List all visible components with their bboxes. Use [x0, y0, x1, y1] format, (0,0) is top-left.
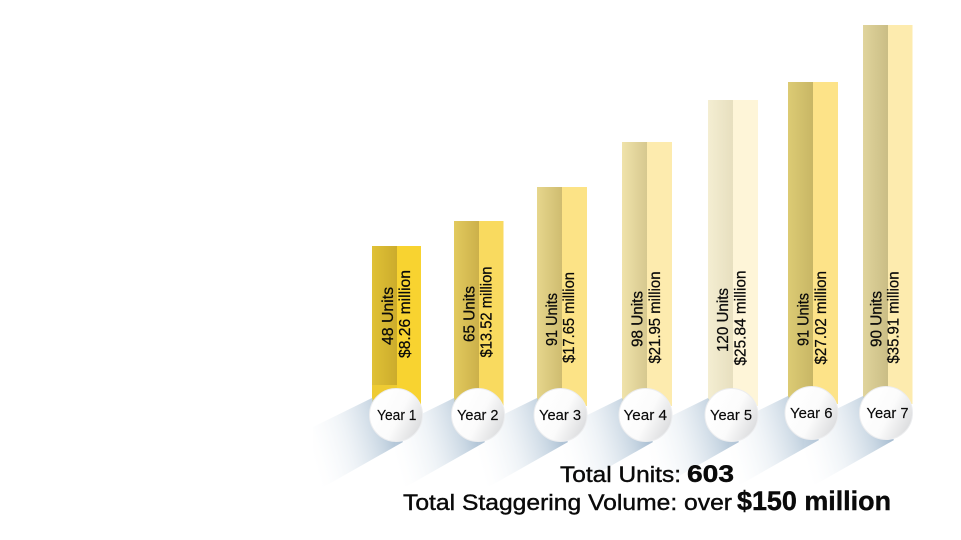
- label: Year 7 values: [868, 272, 902, 364]
- label: Year 4 values: [630, 272, 664, 364]
- label: Year 7 values: 90 Units: [868, 291, 886, 347]
- bar: Year 2: [454, 221, 504, 406]
- bar: Year 5: [708, 100, 758, 406]
- circle badge: Year 6: Year 6: [790, 406, 832, 422]
- total units line: [560, 461, 734, 488]
- bar: Year 3: [537, 187, 587, 406]
- label: Year 2 values: 65 Units: [462, 286, 478, 342]
- label: Year 5 values: 120 Units: [715, 288, 732, 352]
- circle badge: Year 5: [705, 388, 758, 442]
- total volume line: Total Staggering Volume: over: [403, 490, 732, 515]
- label: Year 3 values: $17.65 million: [561, 272, 578, 363]
- circle badge: Year 6: [785, 386, 838, 440]
- total volume line: $150 million: [737, 486, 891, 516]
- label: Year 3 values: 91 Units: [544, 293, 561, 346]
- circle badge: Year 7: [860, 386, 912, 440]
- diagonal shadows: [313, 396, 894, 493]
- circle badge: Year 1: Year 1: [377, 408, 416, 424]
- circle badge: Year 3: Year 3: [539, 408, 581, 424]
- label: Year 5 values: [715, 270, 750, 366]
- label: Year 6 values: $27.02 million: [813, 271, 830, 364]
- label: Year 2 values: $13.52 million: [478, 266, 496, 358]
- bar: Year 4: [622, 142, 672, 406]
- circle badge: Year 1: [370, 388, 422, 442]
- circle badge: Year 3: [534, 388, 587, 442]
- total units line: 603: [687, 461, 734, 488]
- label: Year 4 values: $21.95 million: [647, 272, 664, 364]
- total units line: Total Units:: [560, 462, 681, 487]
- label: Year 1 values: [380, 270, 414, 358]
- circle badge: Year 5: Year 5: [710, 408, 752, 424]
- circle badge: Year 7: Year 7: [866, 406, 908, 422]
- bar: Year 6: [788, 82, 838, 404]
- label: Year 6 values: 91 Units: [796, 293, 812, 346]
- circle badge: Year 4: Year 4: [624, 408, 667, 424]
- bar: Year 7: [863, 25, 912, 404]
- label: Year 7 values: $35.91 million: [886, 272, 902, 364]
- label: Year 1 values: $8.26 million: [397, 270, 414, 358]
- total volume line: [403, 486, 891, 516]
- label: Year 2 values: [462, 266, 496, 358]
- label: Year 3 values: [544, 272, 578, 363]
- circle badge: Year 2: Year 2: [457, 408, 498, 424]
- label: Year 1 values: 48 Units: [380, 287, 397, 345]
- label: Year 5 values: $25.84 million: [732, 270, 750, 366]
- label: Year 4 values: 98 Units: [630, 291, 646, 347]
- circle badge: Year 4: [619, 388, 672, 442]
- label: Year 6 values: [796, 271, 830, 364]
- bar: Year 1: [372, 246, 421, 406]
- circle badge: Year 2: [452, 388, 504, 442]
